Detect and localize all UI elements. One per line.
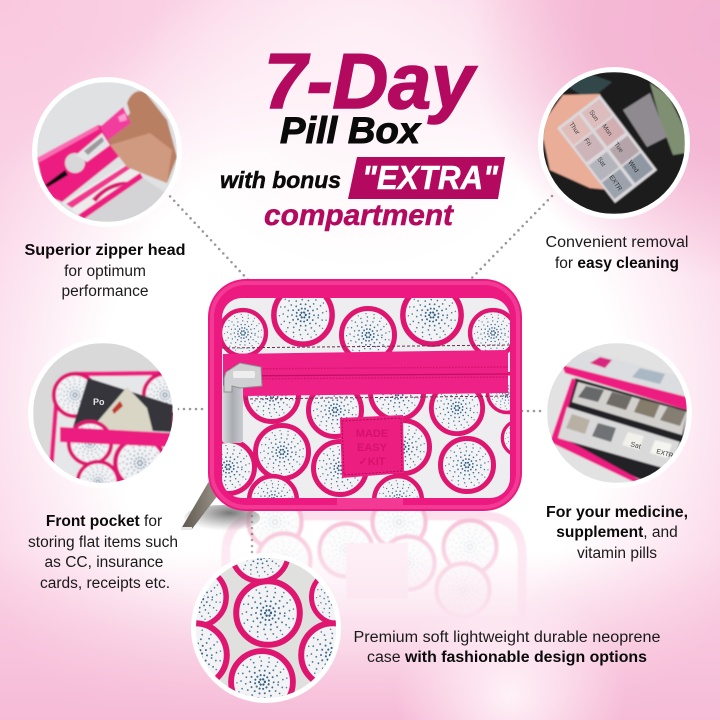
caption: front pocket [28, 513, 178, 592]
caption: pills: For your medicine, [546, 504, 688, 521]
brand tag [340, 415, 404, 478]
photo: pills [542, 338, 692, 488]
caption: neoprene [354, 629, 660, 666]
caption: front pocket: Front pocket for [46, 513, 162, 530]
photo: cleaning: Thur [567, 121, 581, 137]
caption: pills [546, 504, 688, 562]
caption: pills: supplement, and [556, 524, 678, 541]
photo: cleaning: Sat [595, 156, 607, 168]
photo: cleaning: EXTR [607, 174, 623, 193]
caption: zipper: for optimum [64, 263, 146, 280]
badge: EXTRA: "EXTRA" [362, 159, 498, 196]
photo: pills: Sat [629, 441, 642, 451]
photo: zipper head [32, 77, 182, 227]
photo: cleaning [538, 67, 690, 219]
zipper pull shadow [184, 505, 260, 531]
brand tag: ✓KIT [359, 456, 386, 468]
photo: front pocket [28, 343, 178, 486]
heading: Pill Box: Pill Box [280, 110, 421, 151]
bottom strap [337, 498, 403, 509]
zipper head [222, 363, 262, 443]
brand tag: EASY [357, 442, 388, 454]
leader line: cleaning [468, 196, 552, 282]
caption: front pocket: cards, receipts etc. [40, 575, 170, 592]
photo: cleaning: Fri [582, 137, 592, 147]
caption: zipper: Superior zipper head [24, 242, 185, 259]
caption: zipper: performance [61, 283, 149, 300]
photo: pills: EXTR [655, 448, 674, 460]
caption: cleaning [546, 234, 688, 272]
brand tag: MADE [356, 428, 388, 440]
caption: cleaning: Convenient removal [546, 234, 688, 251]
photo: fabric pattern [191, 553, 341, 703]
photo: cleaning: Wed [626, 159, 640, 174]
reflection of the case [222, 511, 526, 609]
zipper pull tab [181, 475, 225, 530]
case body [208, 279, 522, 511]
caption: front pocket: as CC, insurance [45, 554, 163, 571]
leader line: pills [522, 410, 544, 412]
heading: compartment: compartment [264, 199, 455, 232]
product: pill case [181, 279, 538, 531]
heading: with bonus: with bonus [220, 167, 341, 193]
caption: neoprene: case with fashionable design options [367, 649, 647, 666]
photo: cleaning: Tue [612, 141, 625, 154]
leader line: pocket [178, 408, 208, 410]
photo: cleaning: Mon [600, 123, 614, 138]
caption: cleaning: for easy cleaning [555, 255, 679, 272]
caption: pills: vitamin pills [577, 545, 657, 562]
photo: cleaning: Sun [587, 109, 600, 123]
heading: 7-Day: 7-Day [264, 37, 478, 125]
pocket zipper band [223, 350, 508, 396]
leader line: pattern [251, 504, 253, 556]
title [220, 37, 505, 232]
leader line: zipper [166, 192, 250, 282]
caption: front pocket: storing flat items such [28, 534, 178, 551]
fabric pattern [222, 298, 510, 498]
photo: front pocket: Po [93, 397, 105, 407]
caption: neoprene: Premium soft lightweight durable neoprene [354, 629, 660, 646]
caption: zipper [24, 242, 185, 300]
